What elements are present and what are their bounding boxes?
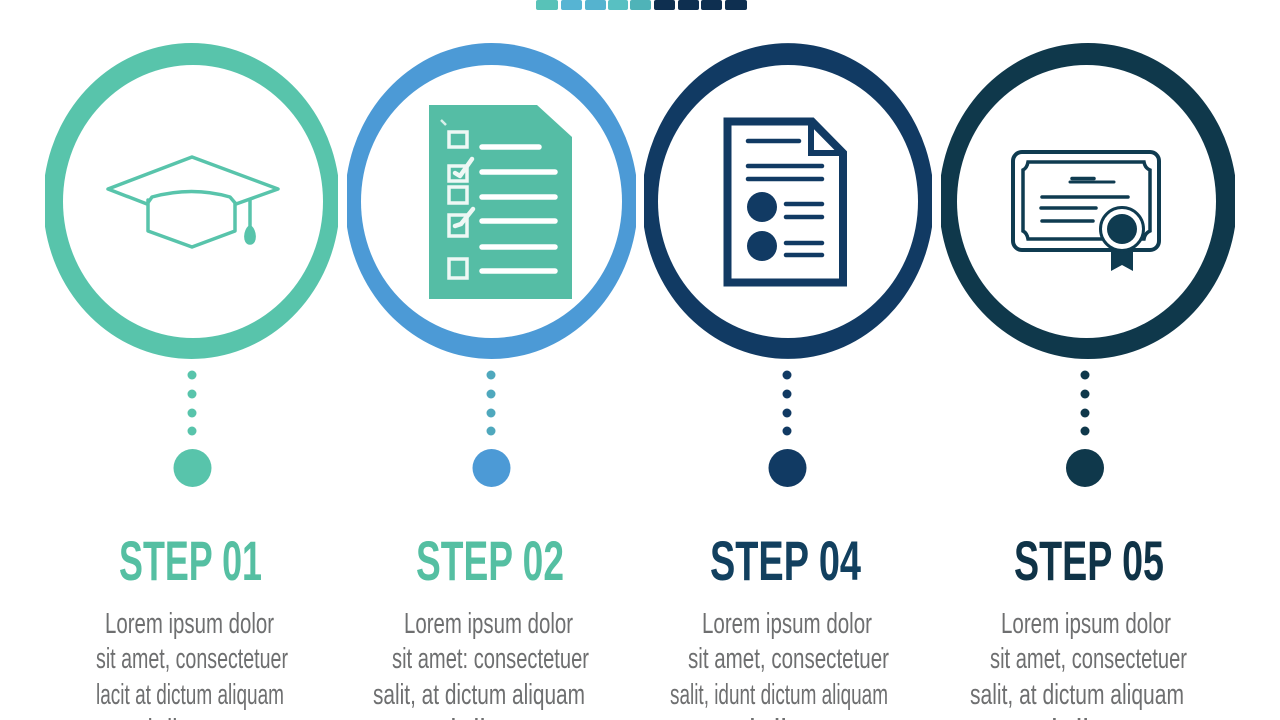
panel: step 04 xyxy=(644,43,932,720)
connector dots: step 01 xyxy=(188,370,196,436)
text block: step 05: sit amet, consectetuer xyxy=(990,643,1187,675)
connector dots: step 02 xyxy=(486,370,496,436)
icon: certificate xyxy=(1013,152,1159,271)
top progress bar xyxy=(536,0,747,10)
text block: step 02 xyxy=(373,608,589,720)
text block: step 05: Lorem ipsum dolor xyxy=(1001,608,1171,640)
ring: step 01 xyxy=(45,43,338,359)
ring: step 05 xyxy=(941,43,1235,359)
marker: step 05 xyxy=(1066,449,1104,487)
text block: step 02: salit, at dictum aliquam xyxy=(373,679,585,711)
panel: step 01 xyxy=(45,43,338,720)
text block: step 05: salit, at dictum aliquam xyxy=(970,679,1184,711)
text block: step 01 xyxy=(96,608,288,720)
ring: step 02 xyxy=(347,43,636,359)
text block: step 04: Lorem ipsum dolor xyxy=(702,608,872,640)
text block: step 01: Lorem ipsum dolor xyxy=(105,608,274,640)
marker: step 02 xyxy=(472,449,510,487)
text block: step 04: sit amet, consectetuer xyxy=(688,643,889,675)
text block: step 04 xyxy=(670,608,889,720)
text block: step 01: lacit at dictum aliquam xyxy=(96,679,284,711)
icon: checklist document xyxy=(429,105,572,299)
heading: step 02: STEP 02 xyxy=(416,529,564,592)
heading: step 01: STEP 01 xyxy=(119,529,262,592)
text block: step 05 xyxy=(970,608,1187,720)
connector dots: step 04 xyxy=(782,370,792,436)
text block: step 01: sit amet, consectetuer xyxy=(96,643,288,675)
text block: step 02: sit amet: consectetuer xyxy=(392,643,589,675)
text block: step 04: salit, idunt dictum aliquam xyxy=(670,679,888,711)
text block: step 02: Lorem ipsum dolor xyxy=(404,608,573,640)
icon: graduation cap xyxy=(108,157,278,247)
heading: step 05: STEP 05 xyxy=(1014,529,1164,592)
connector dots: step 05 xyxy=(1080,370,1090,436)
heading: step 04: STEP 04 xyxy=(710,529,861,592)
panel: step 02 xyxy=(347,43,636,720)
marker: step 01 xyxy=(174,449,212,487)
icon: document with bullets xyxy=(728,122,843,282)
ring: step 04 xyxy=(644,43,932,359)
marker: step 04 xyxy=(768,449,806,487)
panel: step 05 xyxy=(941,43,1235,720)
